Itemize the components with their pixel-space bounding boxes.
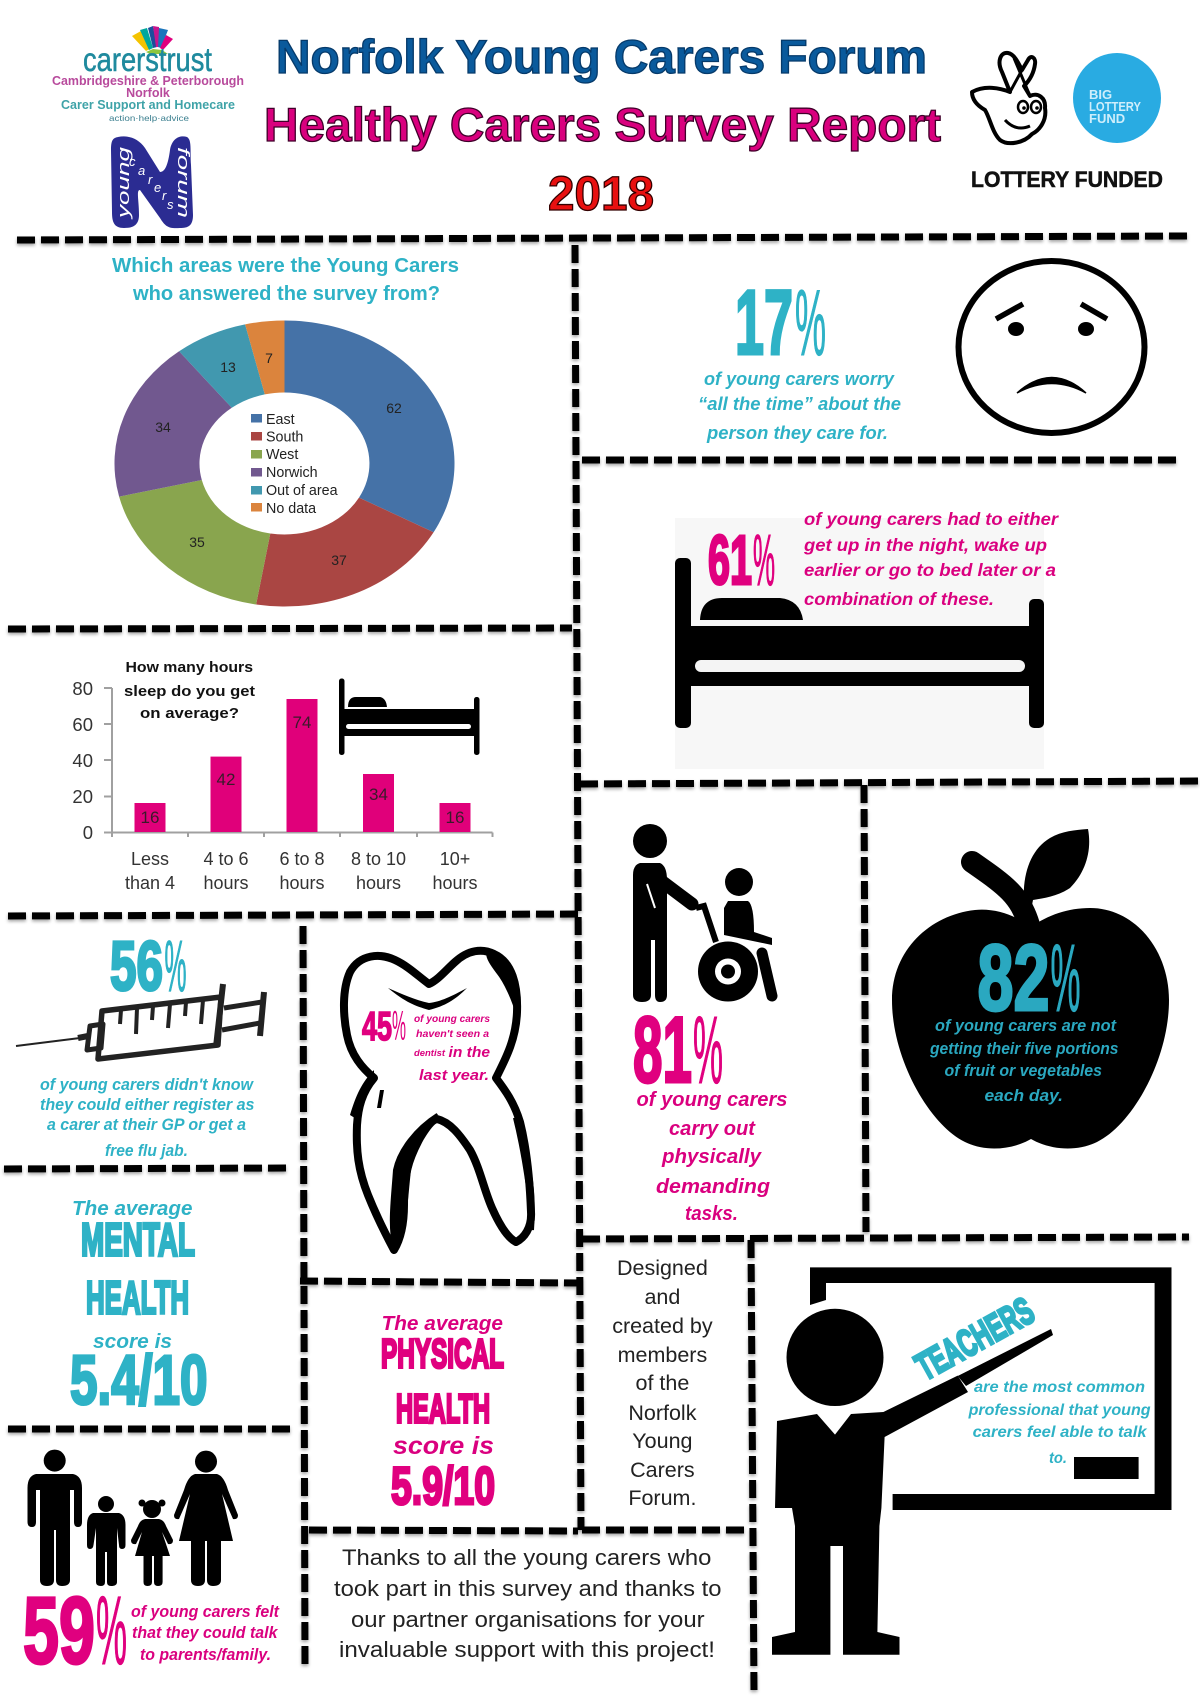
- icon: carer pushing wheelchair: [633, 824, 772, 1002]
- panel: 61% sleep disruption: %: [753, 521, 775, 601]
- logo strapline: [52, 73, 244, 123]
- bar chart: 40: [72, 750, 93, 771]
- title line 2: Healthy Carers Survey Report: [264, 98, 941, 151]
- family text: of young carers felt: [131, 1602, 280, 1621]
- panel: designed and created by: Forum.: [628, 1486, 696, 1510]
- panel: designed and created by: of the: [636, 1371, 689, 1395]
- logo: young carers forum N: young: [114, 146, 133, 220]
- black rectangle: [1074, 1457, 1139, 1479]
- title year: 2018: [548, 168, 654, 221]
- mental intro: The average: [72, 1198, 192, 1220]
- donut chart: [114, 320, 455, 607]
- icon: lottery crossed fingers hand: [972, 53, 1045, 143]
- stat 45%: 45: [362, 1003, 392, 1049]
- sleep text: earlier or go to bed later or a: [804, 560, 1056, 580]
- lottery funded label: LOTTERY FUNDED: [971, 167, 1163, 192]
- donut chart: 35: [189, 534, 205, 550]
- bar chart: 16: [141, 808, 159, 827]
- donut legend: Norwich: [266, 465, 318, 481]
- bar chart: 74: [293, 713, 311, 732]
- panel: thanks message: invaluable support with this project!: [339, 1637, 715, 1662]
- panel: designed and created by: created by: [612, 1314, 713, 1338]
- panel: thanks message: took part in this survey and thanks to: [334, 1576, 722, 1601]
- donut legend: No data: [266, 501, 316, 517]
- panel: survey areas donut: [112, 255, 459, 607]
- logo: lottery funded: [971, 53, 1163, 192]
- panel: designed and created by: Designed: [617, 1256, 708, 1280]
- icon: big lottery fund circle: FUND: [1089, 111, 1125, 126]
- bar chart: 16: [446, 808, 464, 827]
- dentist text: haven't seen a: [416, 1029, 489, 1040]
- panel: 59% talk to family: %: [96, 1576, 127, 1685]
- bar chart: [72, 678, 492, 893]
- title: [264, 30, 941, 221]
- stat 17%: 17: [735, 272, 793, 374]
- physical heading: HEALTH: [396, 1386, 490, 1432]
- family text: to parents/family.: [140, 1645, 271, 1664]
- logo: young carers forum N: carers: [129, 154, 174, 212]
- physical tasks text: [636, 1089, 788, 1225]
- dentist text: in the: [448, 1044, 490, 1061]
- panel: physical health score: [381, 1313, 504, 1516]
- icon: big lottery fund circle: LOTTERY: [1089, 99, 1141, 114]
- chart heading: How many hours: [126, 659, 253, 676]
- worry text: “all the time” about the: [698, 394, 901, 414]
- panel: hours of sleep bar chart: [72, 659, 492, 893]
- sleep text: get up in the night, wake up: [803, 535, 1047, 555]
- bar chart: 6 to 8: [279, 849, 325, 869]
- stat 81%: 81: [633, 997, 692, 1102]
- panel: designed and created by: Norfolk: [628, 1401, 697, 1425]
- icon: apple: [892, 829, 1169, 1148]
- sleep text: combination of these.: [804, 589, 994, 609]
- bar chart: 4 to 6: [203, 849, 249, 869]
- stat 82%: 82: [978, 925, 1050, 1030]
- donut chart: 13: [220, 359, 236, 375]
- panel: thanks message: Thanks to all the young carers who: [342, 1545, 711, 1570]
- panel: designed and created by: Young: [632, 1429, 693, 1453]
- logo strapline: Norfolk: [126, 86, 170, 100]
- mental score label: score is: [93, 1331, 172, 1353]
- teachers text: to.: [1049, 1450, 1067, 1467]
- physical tasks text: demanding: [656, 1176, 770, 1198]
- worry text: person they care for.: [706, 423, 888, 443]
- dentist text: last year.: [419, 1067, 489, 1084]
- bed background: [675, 518, 1044, 769]
- bar chart: 8 to 10: [351, 849, 406, 869]
- panel: 82% fruit and vegetables: [892, 829, 1169, 1148]
- donut heading: Which areas were the Young Carers: [112, 255, 459, 277]
- dentist text: of young carers: [414, 1014, 490, 1025]
- flu jab text: free flu jab.: [105, 1142, 188, 1160]
- panel: 61% sleep disruption: [675, 509, 1059, 769]
- panel: 82% fruit and vegetables: %: [1050, 925, 1080, 1032]
- logo strapline: Cambridgeshire & Peterborough: [52, 73, 244, 88]
- physical intro: The average: [382, 1313, 503, 1335]
- bar chart: hours: [203, 873, 249, 893]
- dentist text: [414, 1014, 490, 1084]
- panel: designed and created by: members: [618, 1343, 707, 1367]
- teachers text: professional that young: [968, 1402, 1151, 1419]
- teachers text: are the most common: [974, 1379, 1145, 1396]
- physical tasks text: carry out: [669, 1118, 756, 1140]
- worry text: of young carers worry: [704, 369, 895, 389]
- flu jab text: a carer at their GP or get a: [47, 1116, 246, 1134]
- icon: large bed: [675, 558, 1044, 728]
- bar chart: 0: [83, 822, 93, 843]
- flu jab text: of young carers didn't know: [40, 1076, 254, 1094]
- bar chart: 20: [72, 786, 93, 807]
- carers trust wordmark: carerstrust: [83, 41, 212, 78]
- icon: big lottery fund circle: BIG: [1089, 87, 1112, 102]
- logo strapline: action·help·advice: [109, 113, 189, 123]
- panel: designed and created by: and: [644, 1285, 680, 1309]
- bar chart: Less: [131, 849, 169, 869]
- physical heading: PHYSICAL: [381, 1330, 504, 1376]
- physical tasks text: of young carers: [636, 1089, 788, 1111]
- panel: 17% worry: [698, 261, 1144, 443]
- logo strapline: Carer Support and Homecare: [61, 97, 235, 112]
- panel: designed and created by: Carers: [630, 1458, 695, 1482]
- worry text: [698, 369, 901, 443]
- teachers text: carers feel able to talk: [973, 1424, 1148, 1441]
- fruit text: of fruit or vegetables: [944, 1062, 1102, 1080]
- fruit text: [929, 1017, 1118, 1105]
- physical score value: 5.9/10: [391, 1457, 495, 1516]
- bar chart: 60: [72, 714, 93, 735]
- mental heading: MENTAL: [81, 1214, 195, 1266]
- icon: big lottery fund circle: [1073, 53, 1161, 143]
- donut legend: South: [266, 430, 303, 446]
- mental heading: [81, 1214, 195, 1324]
- sleep text: [803, 509, 1059, 609]
- title line 1: Norfolk Young Carers Forum: [276, 30, 927, 83]
- panel: teachers: [772, 1267, 1172, 1655]
- teachers heading: TEACHERS: [909, 1290, 1041, 1389]
- logo: young carers forum N: forum: [174, 147, 193, 218]
- teachers text: [968, 1379, 1151, 1467]
- chart heading: [124, 659, 255, 722]
- bar chart: 42: [217, 770, 235, 789]
- physical tasks text: physically: [661, 1146, 762, 1168]
- panel: 59% talk to family: [23, 1450, 280, 1685]
- bar chart: hours: [279, 873, 325, 893]
- sleep text: of young carers had to either: [804, 509, 1059, 529]
- physical tasks text: tasks.: [685, 1203, 738, 1225]
- chart heading: on average?: [140, 705, 239, 722]
- donut heading: [112, 255, 459, 305]
- fruit text: each day.: [984, 1087, 1063, 1105]
- icon: board: [810, 1267, 1172, 1510]
- logo: carers trust: [52, 26, 244, 123]
- panel: thanks message: [334, 1545, 722, 1662]
- bar chart: 10+: [440, 849, 470, 869]
- chart heading: sleep do you get: [124, 683, 255, 700]
- icon: syringe: [16, 984, 264, 1059]
- donut chart: 62: [386, 400, 402, 416]
- stat 56%: 56: [110, 927, 163, 1005]
- icon: family silhouettes: [28, 1450, 238, 1586]
- panel: 56% GP and flu jab: %: [164, 927, 186, 1007]
- panel: 45% dentist tooth: [344, 951, 534, 1250]
- donut chart: 7: [265, 350, 273, 366]
- donut heading: who answered the survey from?: [132, 283, 440, 305]
- panel: 45% dentist tooth: %: [392, 1002, 406, 1049]
- icon: tooth: [344, 951, 534, 1250]
- mental score value: 5.4/10: [70, 1341, 208, 1419]
- logo: young carers forum N: [111, 136, 193, 228]
- donut legend: West: [266, 447, 298, 463]
- dentist text: dentist: [414, 1048, 446, 1058]
- icon: sad face: [958, 261, 1144, 433]
- donut legend: [251, 412, 338, 517]
- flu jab text: they could either register as: [40, 1096, 254, 1114]
- bar chart: 80: [72, 678, 93, 699]
- donut chart: 34: [155, 419, 171, 435]
- stat 61%: 61: [708, 521, 752, 599]
- panel: mental health score: [70, 1198, 208, 1419]
- icon: small bed: [339, 678, 480, 755]
- panel: thanks message: our partner organisations for your: [351, 1607, 705, 1632]
- panel: 56% GP and flu jab: [16, 927, 264, 1160]
- donut chart: 37: [331, 552, 347, 568]
- panel: designed and created by: [612, 1256, 713, 1510]
- bar chart: 34: [369, 785, 388, 804]
- physical score label: score is: [393, 1432, 494, 1460]
- physical heading: [381, 1330, 504, 1432]
- icon: carers trust fan: [132, 26, 173, 54]
- donut legend: Out of area: [266, 483, 338, 499]
- panel: 17% worry: %: [795, 270, 826, 375]
- icon: teacher silhouette: [772, 1309, 1053, 1655]
- flu jab text: [40, 1076, 254, 1160]
- fruit text: of young carers are not: [935, 1017, 1117, 1035]
- donut legend: East: [266, 412, 295, 428]
- panel: 81% physically demanding tasks: %: [693, 997, 723, 1104]
- fruit text: getting their five portions: [929, 1040, 1118, 1058]
- stat 59%: 59: [23, 1578, 95, 1684]
- bar chart: than 4: [125, 873, 175, 893]
- family text: that they could talk: [132, 1623, 279, 1642]
- bar chart: hours: [356, 873, 401, 893]
- bar chart: hours: [432, 873, 478, 893]
- mental heading: HEALTH: [86, 1272, 189, 1324]
- panel: 81% physically demanding tasks: [633, 824, 788, 1225]
- family text: [131, 1602, 280, 1664]
